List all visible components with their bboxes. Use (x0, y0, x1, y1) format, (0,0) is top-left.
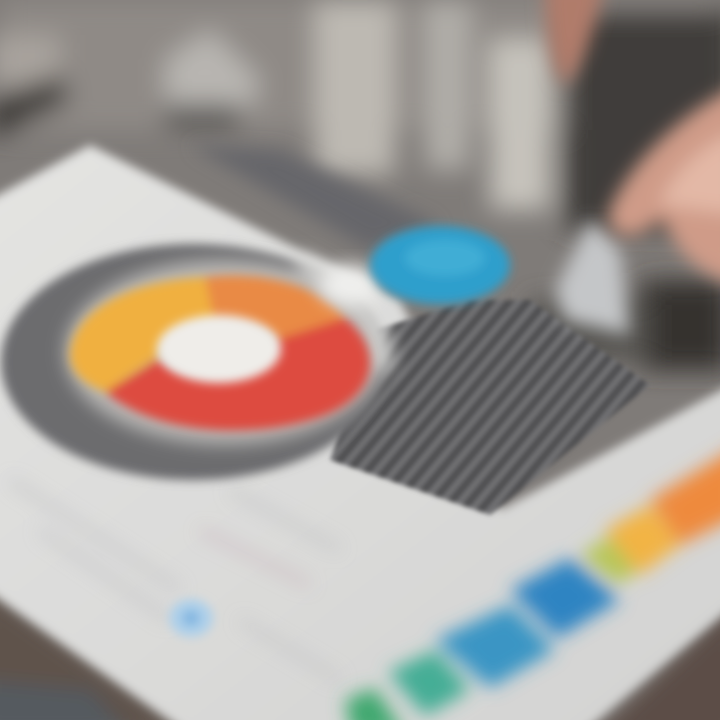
paper sheet (0, 145, 720, 720)
ring highlight (65, 260, 385, 444)
pen tip (555, 220, 630, 335)
hatched grey panel (330, 300, 650, 515)
coloured ring segments (70, 275, 370, 431)
faint paper text lines (10, 480, 340, 680)
dark strip behind the blue disc (190, 145, 440, 250)
white centre (157, 315, 281, 383)
pie chart (1, 244, 385, 480)
dark table bottom left (0, 585, 190, 720)
colour strip (345, 445, 720, 720)
blurred objects behind the paper (0, 0, 720, 370)
hand (545, 0, 720, 285)
grey outer ring (1, 244, 385, 480)
dark table bottom right (590, 600, 720, 720)
blue disc (370, 226, 510, 304)
white glare near the disc (320, 265, 380, 305)
small blue dot (169, 599, 213, 637)
